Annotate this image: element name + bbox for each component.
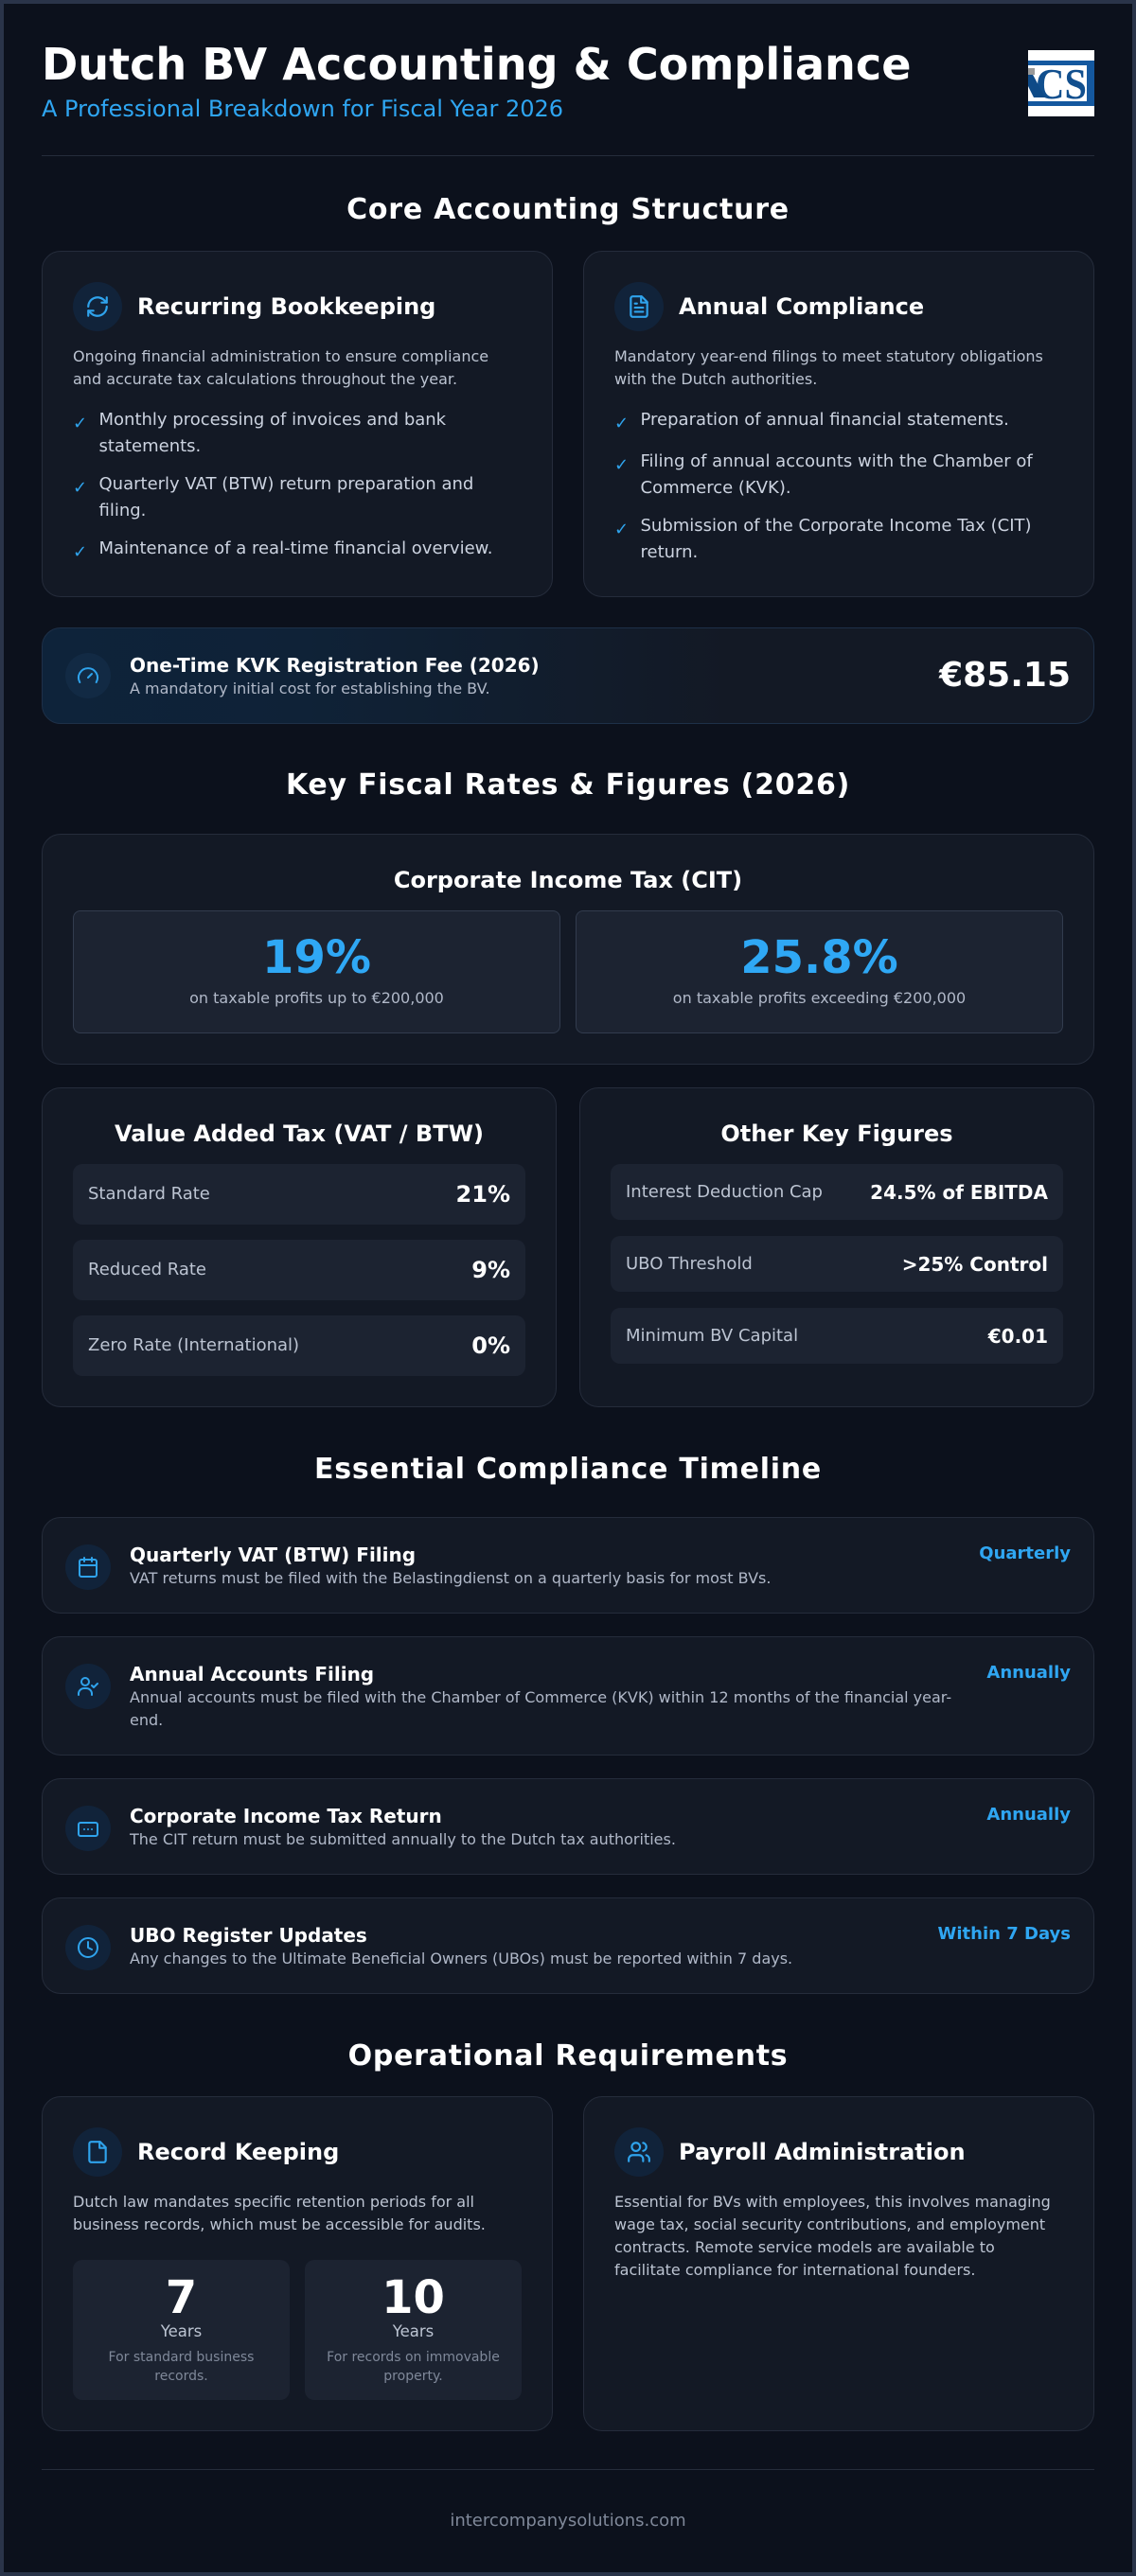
row: capital: €0.01 [988,1325,1048,1348]
card title: Recurring Bookkeeping [137,293,435,320]
subtitle: A Professional Breakdown for Fiscal Year 2026 [42,96,563,122]
item description: end. [130,1711,163,1729]
stat: 7 years: Years [161,2322,202,2340]
item title: UBO Register Updates [130,1924,367,1947]
item title: Quarterly VAT (BTW) Filing [130,1544,416,1566]
logo [1028,50,1094,116]
description: Essential for BVs with employees, this involves managing [614,2193,1051,2211]
row: UBO: >25% Control [902,1253,1048,1276]
stat: 7 years: For standard business [109,2350,254,2365]
icon: calendar [65,1544,111,1590]
card title: Annual Compliance [679,293,924,320]
heading: Operational Requirements: Operational Requirements [348,2039,788,2073]
row: capital: Minimum BV Capital [626,1326,798,1346]
rate box: 19%: on taxable profits up to €200,000 [189,989,444,1007]
description: with the Dutch authorities. [614,370,817,388]
icon: file [73,2127,122,2177]
icon: clock [65,1925,111,1970]
timeline item: CIT return [42,1778,1094,1875]
row: UBO [611,1236,1063,1292]
frequency: Annually [986,1663,1071,1683]
heading: Core Accounting Structure: Core Accounting Structure [346,193,790,226]
panel title: Value Added Tax (VAT / BTW) [115,1120,484,1147]
row: standard: 21% [456,1181,510,1208]
description [73,347,488,388]
item title: Annual Accounts Filing [130,1663,374,1685]
panel: Payroll Administration [583,2096,1094,2431]
row: standard: Standard Rate [88,1184,210,1204]
item description: VAT returns must be filed with the Belastingdienst on a quarterly basis for most BVs. [130,1569,771,1587]
checklist: Preparation of annual financial statements. [640,410,1009,430]
rate box: 25.8%: on taxable profits exceeding €200,000 [673,989,966,1007]
panel: Recurring Bookkeeping [42,251,553,597]
row: reduced: 9% [471,1257,510,1283]
title: Dutch BV Accounting & Compliance [42,39,911,90]
panel: Annual Compliance [583,251,1094,597]
icon: gauge [65,653,111,698]
stat: 10 years [305,2260,522,2400]
row: interest cap: Interest Deduction Cap [626,1182,823,1202]
description: facilitate compliance for international founders. [614,2261,975,2279]
item description: The CIT return must be submitted annually to the Dutch tax authorities. [130,1830,676,1848]
checklist: return. [640,542,698,562]
item title: Corporate Income Tax Return [130,1805,442,1827]
checklist: Commerce (KVK). [640,478,791,498]
description: Ongoing financial administration to ensure compliance [73,347,488,365]
panel title: Corporate Income Tax (CIT) [394,867,742,893]
fee title: One-Time KVK Registration Fee (2026) [130,654,540,677]
item description [130,1688,951,1729]
description: contracts. Remote service models are available to [614,2238,995,2256]
logo: CS [1036,60,1087,108]
stat: 10 years: Years [393,2322,434,2340]
checklist: Submission of the Corporate Income Tax (CIT) [640,516,1032,536]
panel: Record Keeping [42,2096,553,2431]
panel: VAT [42,1087,557,1407]
timeline item: annual accounts [42,1636,1094,1756]
fee description: A mandatory initial cost for establishing the BV. [130,679,490,697]
description: business records, which must be accessible for audits. [73,2215,486,2233]
description: Mandatory year-end filings to meet statutory obligations [614,347,1043,365]
row: interest cap: 24.5% of EBITDA [870,1181,1048,1204]
footer: intercompanysolutions.com [450,2511,686,2531]
panel: KVK registration fee [42,627,1094,724]
icon: refresh [73,282,122,331]
row: capital [611,1308,1063,1364]
rate box: 25.8%: 25.8% [740,931,898,984]
checklist: ✓ [614,455,629,475]
checklist: ✓ [614,414,629,433]
item description: Any changes to the Ultimate Beneficial Owners (UBOs) must be reported within 7 days. [130,1950,792,1967]
row: zero: Zero Rate (International) [88,1335,299,1355]
item description: Annual accounts must be filed with the Chamber of Commerce (KVK) within 12 months of the financial year- [130,1688,951,1706]
rate box: 19% [73,910,560,1033]
icon: dots box [65,1806,111,1851]
row: zero: 0% [471,1332,510,1359]
rate box: 19%: 19% [262,931,371,984]
panel: Corporate Income Tax [42,834,1094,1065]
checklist [614,410,1034,562]
checklist [73,410,492,562]
panel title: Other Key Figures [720,1120,953,1147]
frequency: Within 7 Days [938,1924,1071,1944]
row: zero [73,1315,525,1376]
frequency: Quarterly [979,1544,1071,1563]
description [614,2193,1051,2279]
description [73,2193,486,2233]
description: wage tax, social security contributions, and employment [614,2215,1045,2233]
checklist: Monthly processing of invoices and bank [98,410,446,430]
fee amount: €85.15 [939,656,1071,695]
stat: 10 years: For records on immovable [327,2350,500,2365]
checklist: statements. [98,436,201,456]
checklist: ✓ [73,542,87,562]
row: reduced [73,1240,525,1300]
card title: Payroll Administration [679,2139,966,2165]
heading: Key Fiscal Rates: Key Fiscal Rates & Figures (2026) [286,768,850,802]
stat: 7 years: 7 [166,2271,197,2324]
row: standard [73,1164,525,1225]
row: interest cap [611,1164,1063,1220]
checklist: ✓ [73,478,87,498]
checklist: ✓ [614,520,629,539]
checklist: Filing of annual accounts with the Chamber of [640,451,1033,471]
card title: Record Keeping [137,2139,339,2165]
description: and accurate tax calculations throughout the year. [73,370,457,388]
icon: user check [65,1664,111,1709]
stat: 7 years: records. [154,2369,208,2384]
panel: Other Key Figures [579,1087,1094,1407]
frequency: Annually [986,1805,1071,1825]
checklist: Quarterly VAT (BTW) return preparation and [98,474,473,494]
stat: 10 years: 10 [382,2271,445,2324]
row: reduced: Reduced Rate [88,1260,206,1279]
rate box: 25.8% [576,910,1063,1033]
checklist: filing. [98,501,146,520]
icon: users [614,2127,664,2177]
stat: 7 years [73,2260,290,2400]
checklist: Maintenance of a real-time financial overview. [98,538,492,558]
stat: 10 years: property. [383,2369,443,2384]
timeline item: VAT [42,1517,1094,1614]
heading: Essential Compliance Timeline: Essential Compliance Timeline [314,1453,822,1486]
checklist: ✓ [73,414,87,433]
timeline item: UBO [42,1897,1094,1994]
icon: document [614,282,664,331]
row: UBO: UBO Threshold [626,1254,753,1274]
description: Dutch law mandates specific retention periods for all [73,2193,474,2211]
description [614,347,1043,388]
